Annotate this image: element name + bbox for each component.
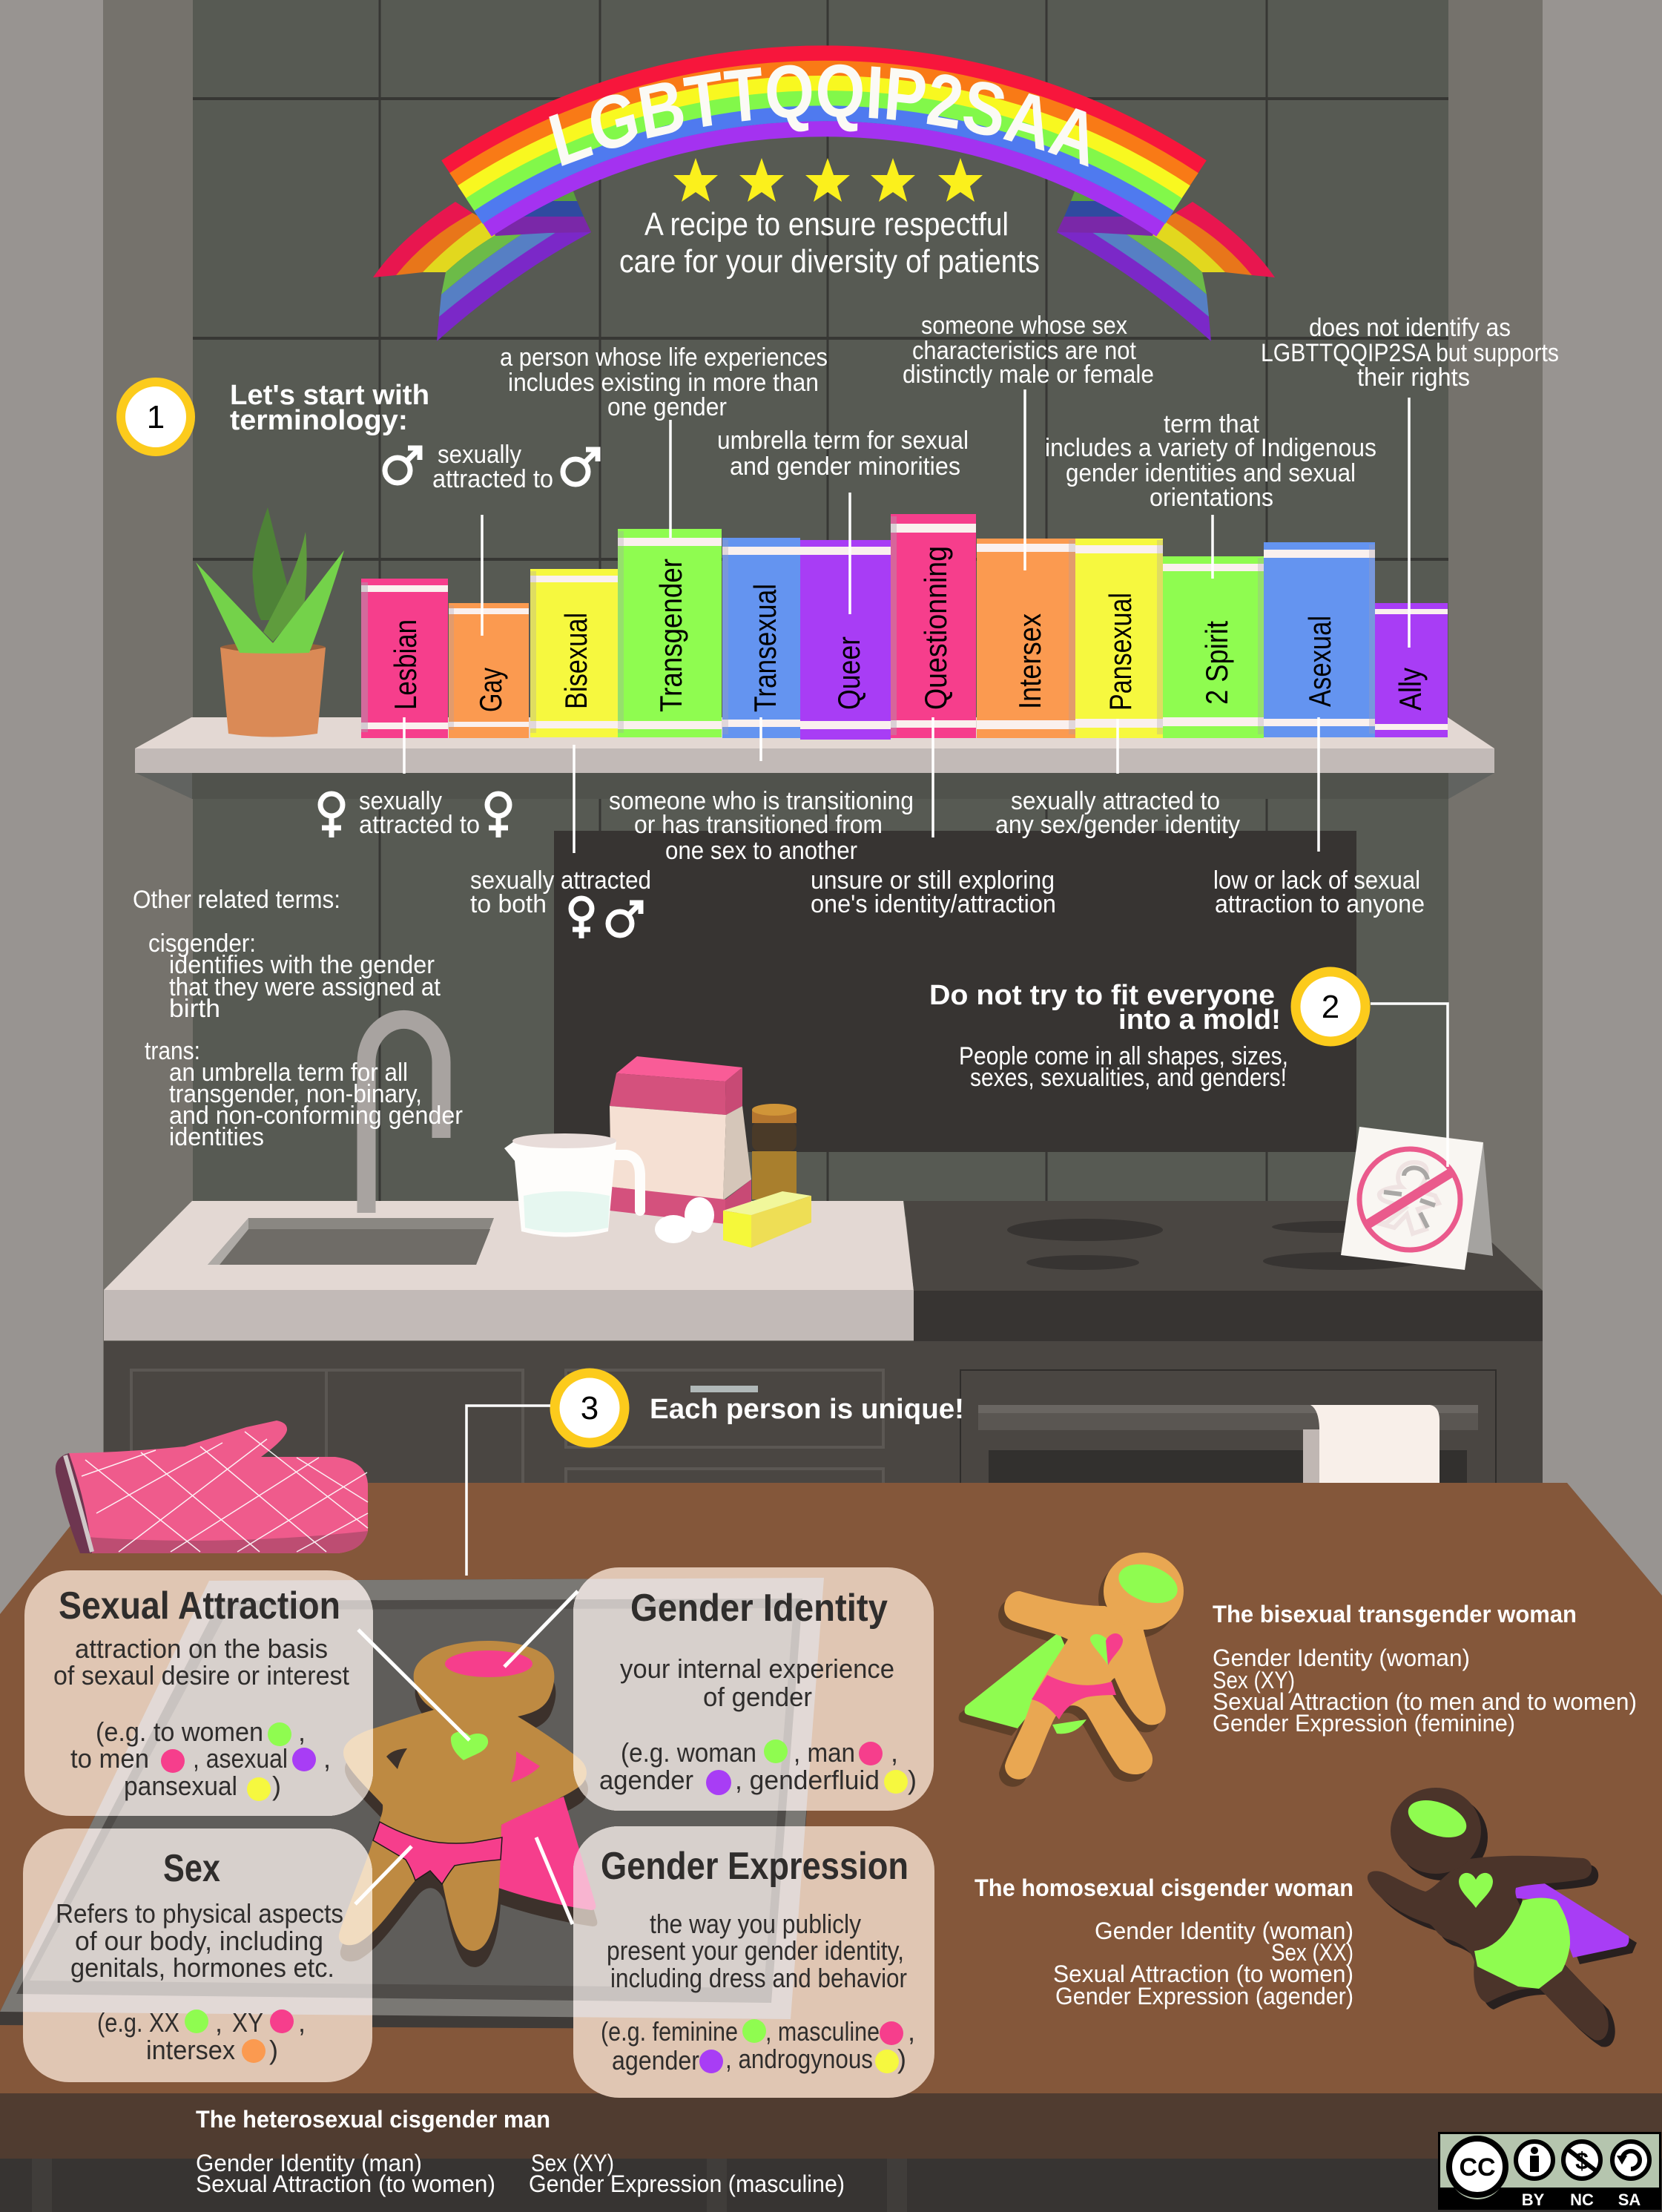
step 2 badge: 2 <box>1322 989 1339 1025</box>
text: homosexual cisgender woman: Gender Identity (woman) <box>1095 1918 1353 1944</box>
card: sex: intersex <box>146 2035 235 2065</box>
card: sex: ) <box>269 2035 278 2065</box>
card: sex: genitals, hormones etc. <box>70 1952 334 1983</box>
book: Questionning: Questionning <box>918 546 953 710</box>
body <box>1368 1788 1609 2041</box>
subtitle: care for your diversity of patients <box>619 243 1040 280</box>
card: gender expression: , <box>908 2016 915 2047</box>
card: gender expression: , masculine <box>765 2016 880 2047</box>
card: sexual attraction <box>53 1584 349 1801</box>
label: transgender definition: includes existing in more than <box>508 369 819 397</box>
label: pansexual definition: sexually attracted to <box>1011 787 1220 815</box>
book: Asexual: Asexual <box>1302 616 1337 707</box>
text: heterosexual cisgender man: Gender Identity (man) <box>196 2150 422 2176</box>
label: gay definition: sexually <box>438 441 521 469</box>
card: sexual attraction: (e.g. to women <box>96 1716 263 1747</box>
card: sex: , <box>298 2007 306 2038</box>
text: bisexual transgender woman: Gender Identity (woman) <box>1213 1645 1470 1671</box>
bottle <box>752 1104 797 1199</box>
book: Ally <box>1375 603 1448 737</box>
text: homosexual cisgender woman: Gender Expression (agender) <box>1055 1983 1353 2009</box>
figure shadow <box>340 1657 597 1967</box>
text: bisexual transgender woman: Sex (XY) <box>1213 1667 1295 1693</box>
baking tray <box>0 1578 824 2030</box>
text: homosexual cisgender woman: Sexual Attraction (to women) <box>1053 1961 1353 1987</box>
flour bag <box>610 1056 751 1224</box>
step 1 badge: 1 <box>147 399 165 435</box>
label: lesbian definition <box>320 787 510 839</box>
card: sex: Refers to physical aspects <box>56 1898 343 1929</box>
creative commons licence badge <box>1438 2132 1661 2210</box>
label: 2 spirit definition: includes a variety of Indigenous <box>1045 434 1376 462</box>
card: sex: XY <box>232 2007 263 2038</box>
book: Transexual: Transexual <box>748 584 782 712</box>
label: asexual definition: low or lack of sexual <box>1213 866 1420 895</box>
other related terms: Other related terms: <box>133 886 340 914</box>
counter with sink <box>104 1019 914 1340</box>
cabinets and oven <box>104 1341 1543 1498</box>
label: pansexual definition: any sex/gender identity <box>995 811 1240 839</box>
measuring jug <box>504 1133 640 1237</box>
figure: bisexual transgender woman <box>959 1553 1184 1787</box>
card: gender expression: present your gender identity, <box>607 1935 904 1966</box>
text: bisexual transgender woman: Sexual Attraction (to men and to women) <box>1213 1688 1637 1715</box>
label: transexual definition: someone who is transitioning <box>609 787 914 815</box>
label: bisexual definition: to both <box>470 890 547 918</box>
label: transgender definition: one gender <box>607 393 727 421</box>
eggs <box>655 1197 714 1243</box>
book: Transexual <box>722 538 800 738</box>
underwear <box>373 1822 502 1884</box>
label: intersex definition: characteristics are not <box>912 337 1136 365</box>
heart <box>1459 1873 1493 1908</box>
card: sexual attraction: attraction on the basis <box>75 1633 328 1664</box>
text: homosexual cisgender woman: Sex (XX) <box>1271 1939 1353 1966</box>
text: people come in all shapes <box>959 1042 1288 1092</box>
book: Pansexual: Pansexual <box>1103 593 1138 711</box>
other related terms: an umbrella term for all <box>169 1059 408 1087</box>
card: sexual attraction: , <box>323 1743 331 1774</box>
card: gender expression: agender <box>612 2045 699 2076</box>
butter <box>723 1191 811 1248</box>
subtitle: A recipe to ensure respectful <box>644 206 1009 243</box>
card: gender identity: , man <box>794 1737 855 1768</box>
book: Ally: Ally <box>1393 668 1428 711</box>
text: heterosexual cisgender man: Gender Expression (masculine) <box>529 2170 845 2197</box>
body <box>339 1641 587 1951</box>
card: gender identity: , genderfluid <box>735 1765 880 1795</box>
rainbow banner <box>373 45 1275 341</box>
heart <box>451 1732 488 1760</box>
book: Transgender: Transgender <box>653 559 688 712</box>
creative commons licence badge: $ <box>1575 2147 1589 2174</box>
text: homosexual cisgender woman <box>975 1874 1353 2009</box>
heading: mold: into a mold! <box>1118 1004 1281 1036</box>
card: gender identity: Gender Identity <box>630 1587 888 1630</box>
other related terms: cisgender: <box>148 929 256 958</box>
book: Asexual <box>1264 542 1375 737</box>
card: sex: (e.g. XX <box>97 2007 179 2038</box>
label: gay definition <box>385 441 598 493</box>
text: people come in all shapes: People come in all shapes, sizes, <box>959 1042 1288 1070</box>
label: transgender definition: a person whose life experiences <box>500 343 828 372</box>
text: heterosexual cisgender man: The heterosexual cisgender man <box>196 2106 550 2133</box>
label: transgender definition <box>500 343 828 421</box>
label: questioning definition: unsure or still exploring <box>811 866 1055 895</box>
other related terms <box>133 886 463 1151</box>
book: Pansexual <box>1075 539 1163 738</box>
card: sexual attraction: , asexual <box>193 1743 288 1774</box>
label: asexual definition: attraction to anyone <box>1215 890 1425 918</box>
step 3 badge <box>555 1373 624 1443</box>
rainbow arch <box>446 53 1202 230</box>
card: sex: Sex <box>163 1847 220 1890</box>
heart <box>1090 1633 1123 1665</box>
card: sexual attraction: of sexaul desire or interest <box>53 1660 349 1691</box>
tray and figure seen through cards <box>0 1578 824 2019</box>
label: intersex definition: distinctly male or female <box>903 361 1154 389</box>
head oval <box>1403 1793 1471 1845</box>
book: Intersex <box>977 539 1075 738</box>
underwear <box>1032 1675 1116 1719</box>
icon: potted plant <box>196 507 344 737</box>
stove <box>904 1201 1543 1341</box>
shelf <box>135 717 1494 799</box>
card: gender identity: ) <box>908 1765 917 1795</box>
other related terms: trans: <box>145 1037 200 1065</box>
book: Lesbian <box>361 579 448 738</box>
book: Bisexual <box>530 569 618 737</box>
book: Transgender <box>618 529 722 737</box>
label: ally definition: their rights <box>1357 363 1470 392</box>
label: pansexual definition <box>995 787 1240 839</box>
card: sex: of our body, including <box>75 1926 323 1956</box>
info cards <box>23 1567 934 2098</box>
creative commons licence badge: SA <box>1618 2190 1640 2209</box>
card: gender identity <box>599 1587 917 1795</box>
other related terms: birth <box>169 995 220 1023</box>
label: 2 spirit definition: gender identities and sexual <box>1066 459 1356 487</box>
figure connector lines <box>355 1591 578 1924</box>
other related terms: identifies with the gender <box>169 951 435 979</box>
card: sexual attraction: , <box>298 1716 306 1747</box>
cape <box>1512 1883 1629 1958</box>
book: Questionning <box>891 514 976 738</box>
head oval <box>1114 1558 1182 1610</box>
label: 2 spirit definition <box>1045 410 1376 512</box>
book: Gay <box>449 603 529 738</box>
card: gender expression: , androgynous <box>725 2044 873 2074</box>
figure shadow <box>1374 1794 1637 2047</box>
card: sex: , <box>215 2007 222 2038</box>
label: questioning definition: one's identity/attraction <box>811 890 1056 918</box>
label: gay definition: attracted to <box>432 465 553 493</box>
label: queer definition: and gender minorities <box>730 452 960 481</box>
card: gender identity: agender <box>599 1765 693 1795</box>
card: gender expression: Gender Expression <box>601 1845 909 1888</box>
banner tails <box>373 191 591 341</box>
label: intersex definition <box>903 312 1154 389</box>
label: lesbian definition: attracted to <box>359 811 480 839</box>
label: transexual definition <box>609 787 914 865</box>
text: homosexual cisgender woman: The homosexual cisgender woman <box>975 1874 1353 1901</box>
heading: terminology: terminology: <box>230 405 408 436</box>
label: questioning definition <box>811 866 1056 918</box>
label: ally definition <box>1261 314 1559 392</box>
card: gender expression: including dress and behavior <box>610 1963 907 1993</box>
head oval <box>445 1650 532 1677</box>
card: sexual attraction: ) <box>272 1771 281 1801</box>
card: sex <box>56 1847 343 2065</box>
text: bisexual transgender woman: Gender Expression (feminine) <box>1213 1710 1515 1737</box>
text: people come in all shapes: sexes, sexualities, and genders! <box>970 1064 1287 1092</box>
label: queer definition: umbrella term for sexual <box>717 427 969 455</box>
card: gender identity: (e.g. woman <box>621 1737 756 1768</box>
label: queer definition <box>717 427 969 481</box>
other related terms: identities <box>169 1123 264 1151</box>
five stars <box>673 158 983 202</box>
text: bisexual transgender woman: The bisexual transgender woman <box>1213 1601 1577 1627</box>
book: 2 Spirit: 2 Spirit <box>1199 621 1234 705</box>
heading: terminology: Let's start with <box>230 380 429 411</box>
connector line to cards <box>466 1406 550 1576</box>
label: asexual definition <box>1213 866 1425 918</box>
other related terms: that they were assigned at <box>169 973 441 1001</box>
label: bisexual definition <box>470 866 651 938</box>
heading: mold <box>929 980 1281 1036</box>
label: bisexual definition: sexually attracted <box>470 866 651 895</box>
book: 2 Spirit <box>1163 556 1264 738</box>
card: sexual attraction: to men <box>70 1743 149 1774</box>
heading: each person is unique: Each person is unique! <box>650 1394 964 1425</box>
card: gender identity: your internal experience <box>620 1653 894 1684</box>
subtitle <box>619 206 1040 280</box>
card: gender identity: , <box>891 1737 898 1768</box>
label: transexual definition: one sex to another <box>665 837 857 865</box>
step 3 badge: 3 <box>581 1390 598 1426</box>
creative commons licence badge: NC <box>1570 2190 1594 2209</box>
label: 2 spirit definition: term that <box>1164 410 1260 438</box>
figure shadow <box>959 1559 1177 1787</box>
leader lines <box>404 389 1409 853</box>
label: transexual definition: or has transitioned from <box>634 811 883 839</box>
heading: mold: Do not try to fit everyone <box>929 980 1275 1011</box>
label: ally definition: LGBTTQQIP2SA but supports <box>1261 339 1559 367</box>
book spines <box>361 514 1448 740</box>
book: Lesbian: Lesbian <box>388 619 423 710</box>
creative commons licence badge: BY <box>1522 2190 1545 2209</box>
arm gap <box>386 1748 407 1769</box>
card: sexual attraction: pansexual <box>124 1771 237 1801</box>
card: gender expression <box>601 1845 915 2076</box>
text: bisexual transgender woman <box>1213 1601 1637 1737</box>
title: LGBTTQQIP2SAA <box>549 64 1089 167</box>
wooden table <box>0 1483 1662 2093</box>
figure: homosexual cisgender woman <box>1368 1788 1637 2047</box>
creative commons licence badge: CC <box>1459 2153 1496 2182</box>
book: Bisexual: Bisexual <box>558 613 593 709</box>
book: Queer: Queer <box>831 636 866 710</box>
text: heterosexual cisgender man: Sex (XY) <box>531 2150 614 2176</box>
text: heterosexual cisgender man <box>196 2106 845 2197</box>
other related terms: and non-conforming gender <box>169 1102 463 1130</box>
main gingerbread figure <box>339 1641 597 1967</box>
book: Intersex: Intersex <box>1012 613 1047 709</box>
label: 2 spirit definition: orientations <box>1150 484 1273 512</box>
book: Queer <box>800 540 891 740</box>
body <box>1004 1553 1184 1780</box>
connector line to sign <box>1371 1004 1448 1167</box>
label: lesbian definition: sexually <box>359 787 442 815</box>
card: gender expression: (e.g. feminine <box>601 2016 738 2047</box>
baking ingredients <box>504 1056 811 1248</box>
cape <box>498 1797 596 1910</box>
heading: terminology <box>230 380 429 436</box>
card: gender expression: ) <box>897 2044 906 2074</box>
card: sexual attraction: Sexual Attraction <box>59 1584 340 1627</box>
cape <box>965 1632 1086 1734</box>
bottom band <box>0 2093 1662 2212</box>
card: gender expression: the way you publicly <box>650 1909 861 1939</box>
step 1 badge <box>121 382 191 452</box>
book: Gay: Gay <box>473 668 508 712</box>
pink chest triangle <box>511 1751 540 1783</box>
step 2 badge <box>1296 972 1365 1041</box>
underwear <box>1474 1897 1570 1989</box>
icon: no cookie cutter sign <box>1341 1127 1493 1270</box>
text: heterosexual cisgender man: Sexual Attraction (to women) <box>196 2170 495 2197</box>
other related terms: transgender, non-binary, <box>169 1080 422 1108</box>
label: intersex definition: someone whose sex <box>921 312 1127 340</box>
label: ally definition: does not identify as <box>1309 314 1511 342</box>
card: gender identity: of gender <box>703 1682 812 1712</box>
icon: oven mitt <box>56 1421 368 1553</box>
